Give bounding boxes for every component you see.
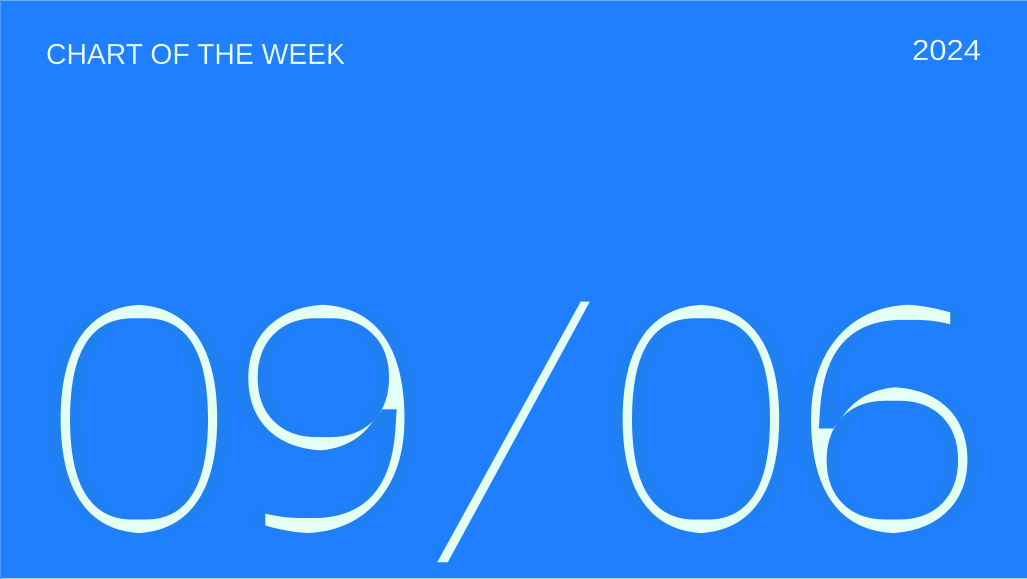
large date: 09 / 06 <box>23 219 1004 579</box>
digits <box>23 241 1004 579</box>
heading: chart of the week: CHART OF THE WEEK <box>46 39 346 71</box>
year label: 2024 <box>912 35 981 67</box>
